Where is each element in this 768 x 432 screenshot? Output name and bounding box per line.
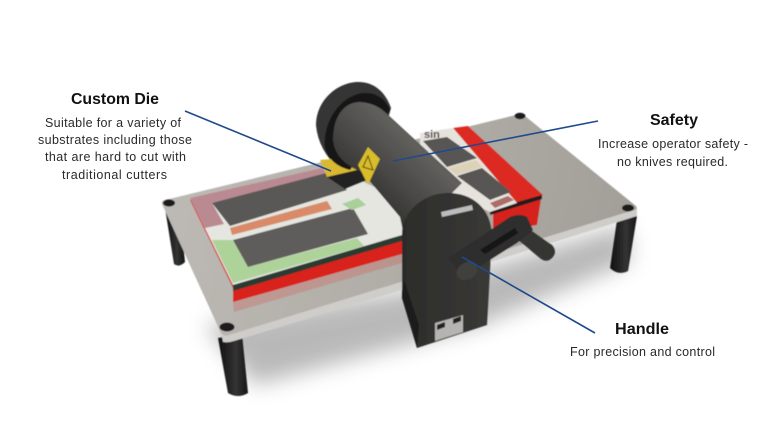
callout: custom die: Custom Die (71, 91, 159, 108)
black ring (325, 93, 390, 170)
rear window 1 (423, 137, 477, 167)
plate screws (163, 113, 634, 332)
rear window 2 (457, 168, 511, 200)
leg: right (610, 216, 637, 273)
leader line: custom die (185, 111, 331, 171)
crank arm (448, 215, 533, 277)
rear print spot (448, 160, 482, 175)
printed carton sheet (190, 128, 517, 291)
rear print red (490, 196, 514, 208)
callout: safety: Increase operator safety - (598, 137, 748, 151)
yellow die tape (320, 157, 357, 177)
red bed (190, 126, 543, 312)
tower info plate (435, 315, 463, 341)
warning label (358, 147, 380, 185)
callout: custom die: that are hard to cut with (45, 150, 186, 164)
callout: handle (570, 321, 715, 359)
die cutting machine (162, 82, 637, 396)
shadow under machine (205, 225, 630, 385)
main roller cylinder (333, 102, 462, 240)
callout: custom die: substrates including those (38, 133, 192, 147)
dark cut window 2 (233, 208, 368, 267)
colourful band (230, 201, 332, 235)
dark cut window 1 (212, 172, 347, 226)
callout: custom die: Suitable for a variety of (45, 116, 182, 130)
callout: safety: Safety (650, 112, 698, 129)
base plate (162, 113, 637, 342)
leader line: safety (393, 121, 598, 161)
callout: safety (598, 112, 748, 169)
green printed margin (212, 238, 364, 283)
green printed patch (342, 198, 366, 210)
callout: handle: For precision and control (570, 345, 715, 359)
callout: handle: Handle (615, 321, 669, 338)
rear sheet (420, 128, 517, 212)
callout: custom die (38, 91, 192, 182)
crank hub (453, 258, 481, 284)
callout: safety: no knives required. (617, 155, 728, 169)
dark die shadow (327, 168, 372, 189)
sheet print text: sin (424, 129, 440, 141)
crank arm slot (480, 228, 518, 254)
leg: front (218, 334, 248, 396)
back tower (316, 82, 391, 170)
callout: custom die: traditional cutters (62, 168, 167, 182)
leg: left (165, 208, 185, 266)
crank grip (518, 226, 555, 261)
front tower (402, 193, 492, 348)
tower top label (441, 205, 473, 217)
pink printed margin (190, 166, 335, 228)
leader line: handle (462, 257, 595, 333)
